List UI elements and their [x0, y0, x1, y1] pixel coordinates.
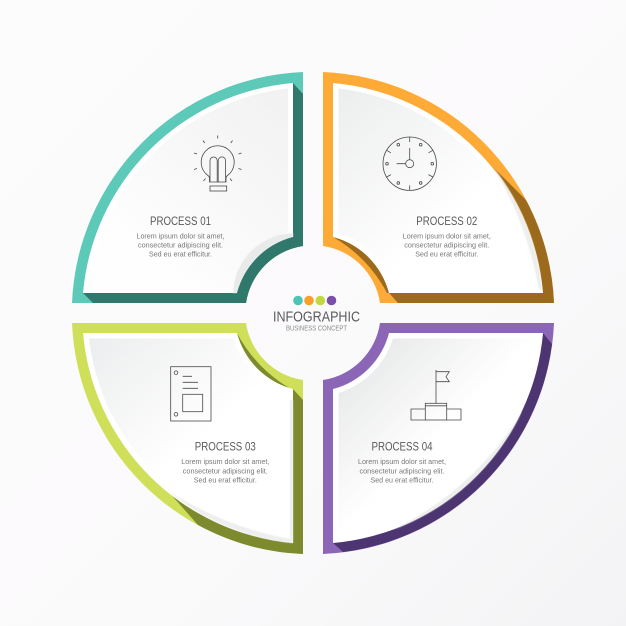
white card — [83, 333, 293, 543]
process 04 text: Sed eu erat efficitur. — [370, 475, 434, 484]
icon: clock — [383, 137, 436, 190]
process 03 text — [181, 442, 269, 484]
dark teal fold — [83, 83, 303, 303]
orange outer band — [323, 72, 554, 303]
process 01 text: PROCESS 01 — [150, 216, 211, 228]
process 03 text: Lorem ipsum dolor sit amet, — [181, 457, 269, 466]
olive fold inner — [237, 333, 293, 389]
brown fold inner — [333, 237, 389, 293]
teal outer band — [72, 72, 303, 303]
process 02 text: consectetur adipiscing elit. — [404, 241, 489, 250]
panel: process 01 — [72, 72, 303, 303]
process 02 text: Lorem ipsum dolor sit amet, — [403, 232, 491, 240]
card shading — [338, 88, 537, 288]
panel: process 03 — [72, 323, 303, 554]
inner edge shade — [233, 233, 293, 293]
outer edge shade — [392, 411, 522, 530]
card shading — [338, 338, 537, 537]
purple outer band — [323, 323, 554, 554]
process 02 text: Sed eu erat efficitur. — [415, 250, 478, 259]
infographic heading: INFOGRAPHIC — [273, 310, 360, 326]
dark purple fold — [333, 333, 552, 552]
lime outer band — [72, 323, 303, 554]
white card — [83, 83, 293, 293]
outer edge shade — [493, 167, 542, 290]
icon: document — [171, 367, 211, 421]
white card — [333, 83, 543, 293]
process 01 text: Sed eu erat efficitur. — [149, 250, 212, 259]
central title block — [273, 296, 360, 332]
brown fold outer — [389, 167, 554, 303]
process 03 text: consectetur adipiscing elit. — [183, 466, 268, 475]
dark teal inner edge — [237, 237, 303, 303]
process 01 text: Lorem ipsum dolor sit amet, — [136, 232, 224, 240]
process 02 text — [403, 216, 491, 259]
process 03 text: Sed eu erat efficitur. — [194, 475, 257, 484]
olive fold outer — [167, 389, 303, 554]
process 04 text: Lorem ipsum dolor sit amet, — [358, 457, 446, 466]
subheading: BUSINESS CONCEPT — [286, 324, 347, 332]
four coloured dots — [293, 296, 336, 305]
process 02 text: PROCESS 02 — [416, 216, 477, 228]
process 01 text — [136, 216, 224, 259]
icon: flag on podium — [411, 370, 461, 420]
icon: light bulb — [194, 136, 242, 191]
white card — [333, 333, 543, 543]
card shading — [89, 338, 288, 537]
card shading — [88, 88, 288, 288]
process 04 text — [358, 442, 446, 484]
process 04 text: PROCESS 04 — [372, 442, 433, 454]
process 03 text: PROCESS 03 — [195, 442, 256, 454]
panel: process 04 — [323, 323, 554, 554]
panel: process 02 — [323, 72, 554, 303]
process 01 text: consectetur adipiscing elit. — [138, 241, 223, 250]
outer edge shade — [167, 400, 293, 543]
process 04 text: consectetur adipiscing elit. — [360, 466, 444, 475]
